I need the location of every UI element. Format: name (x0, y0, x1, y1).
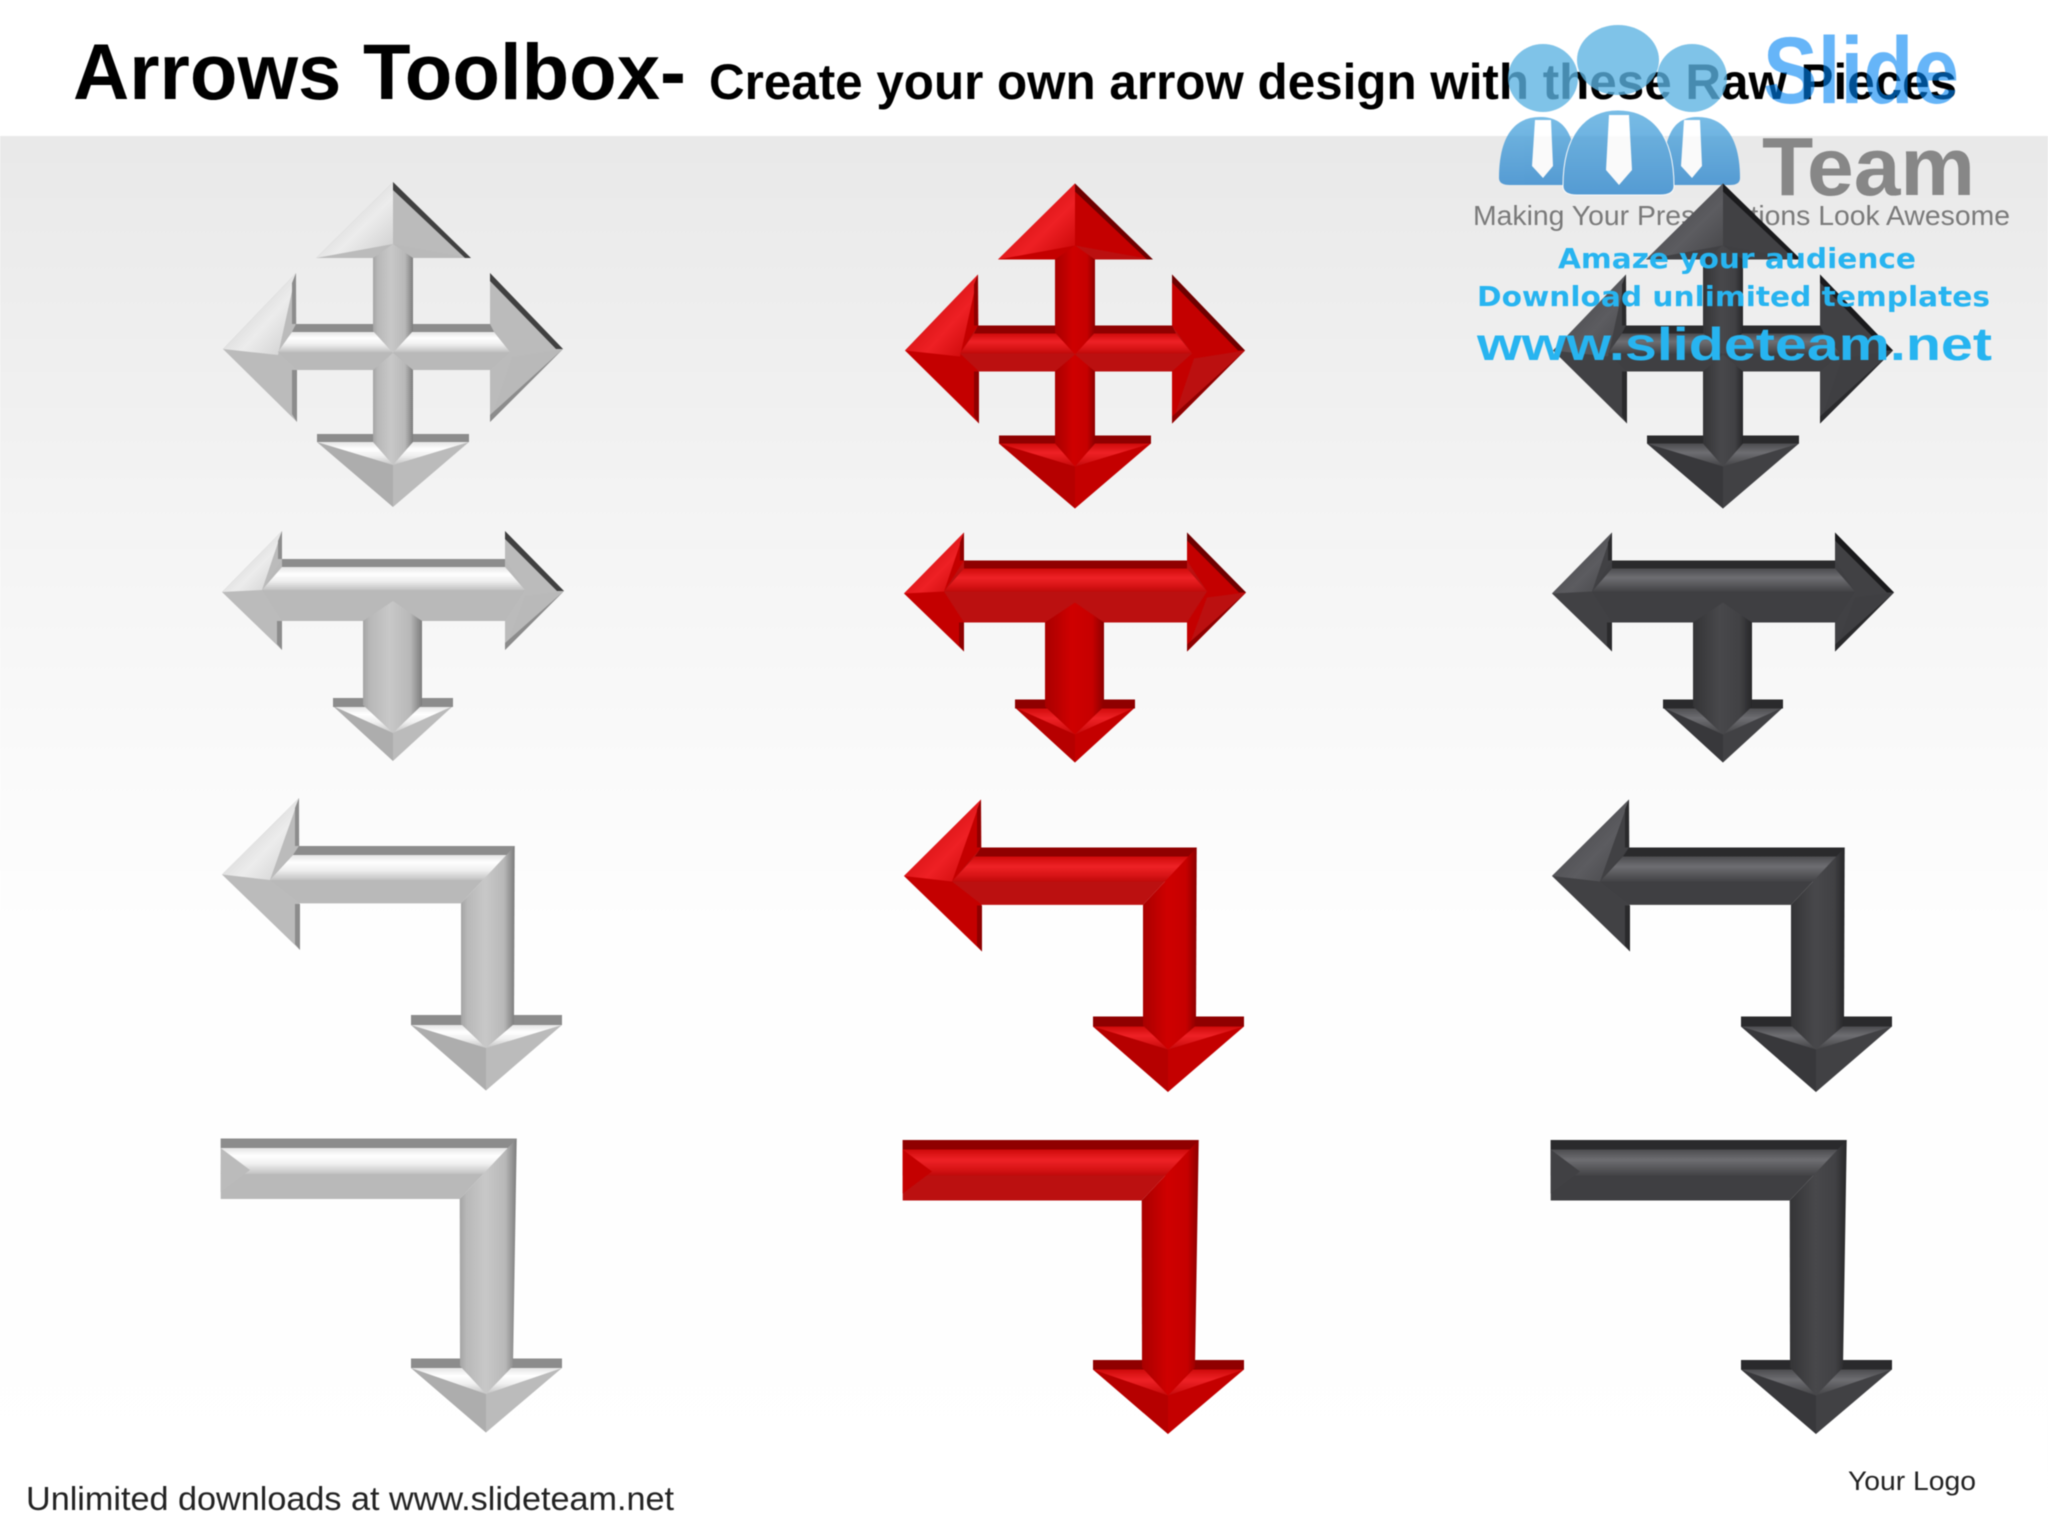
arrow: red four-way (905, 184, 1245, 508)
arrow: dark bent double-head (1552, 800, 1892, 1092)
title (73, 27, 1957, 116)
title: main heading: Arrows Toolbox- (73, 27, 686, 116)
arrow: dark T three-way (1552, 532, 1894, 762)
arrow: red bent double-head (904, 800, 1244, 1092)
icon: three people (1499, 25, 1740, 195)
title: subheading: Create your own arrow design with these Raw Pieces (709, 54, 1957, 110)
footer: downloads note: Unlimited downloads at www.slideteam.net (26, 1480, 674, 1517)
logo word: Slide: Slide (1763, 18, 1959, 124)
arrow: red bent single-head (903, 1140, 1244, 1434)
logo word: Team: Team (1762, 120, 1975, 213)
logo tagline: Making Your Presentations Look Awesome (1473, 200, 2010, 231)
arrow: silver bent single-head (221, 1138, 562, 1432)
arrow: silver T three-way (222, 531, 564, 761)
arrow: silver bent double-head (222, 798, 562, 1090)
arrow: dark four-way (1553, 184, 1893, 508)
footer: your logo: Your Logo (1848, 1466, 1976, 1496)
promo line: download: Download unlimited templates (1477, 280, 1990, 313)
watermark promo text (1476, 242, 1992, 370)
promo line: url: www.slideteam.net (1476, 318, 1992, 370)
promo line: amaze: Amaze your audience (1558, 242, 1916, 275)
arrow: silver four-way (223, 182, 563, 507)
arrow: dark bent single-head (1551, 1140, 1892, 1434)
arrow: red T three-way (904, 532, 1246, 762)
watermark logo: SlideTeam (1473, 18, 2010, 231)
